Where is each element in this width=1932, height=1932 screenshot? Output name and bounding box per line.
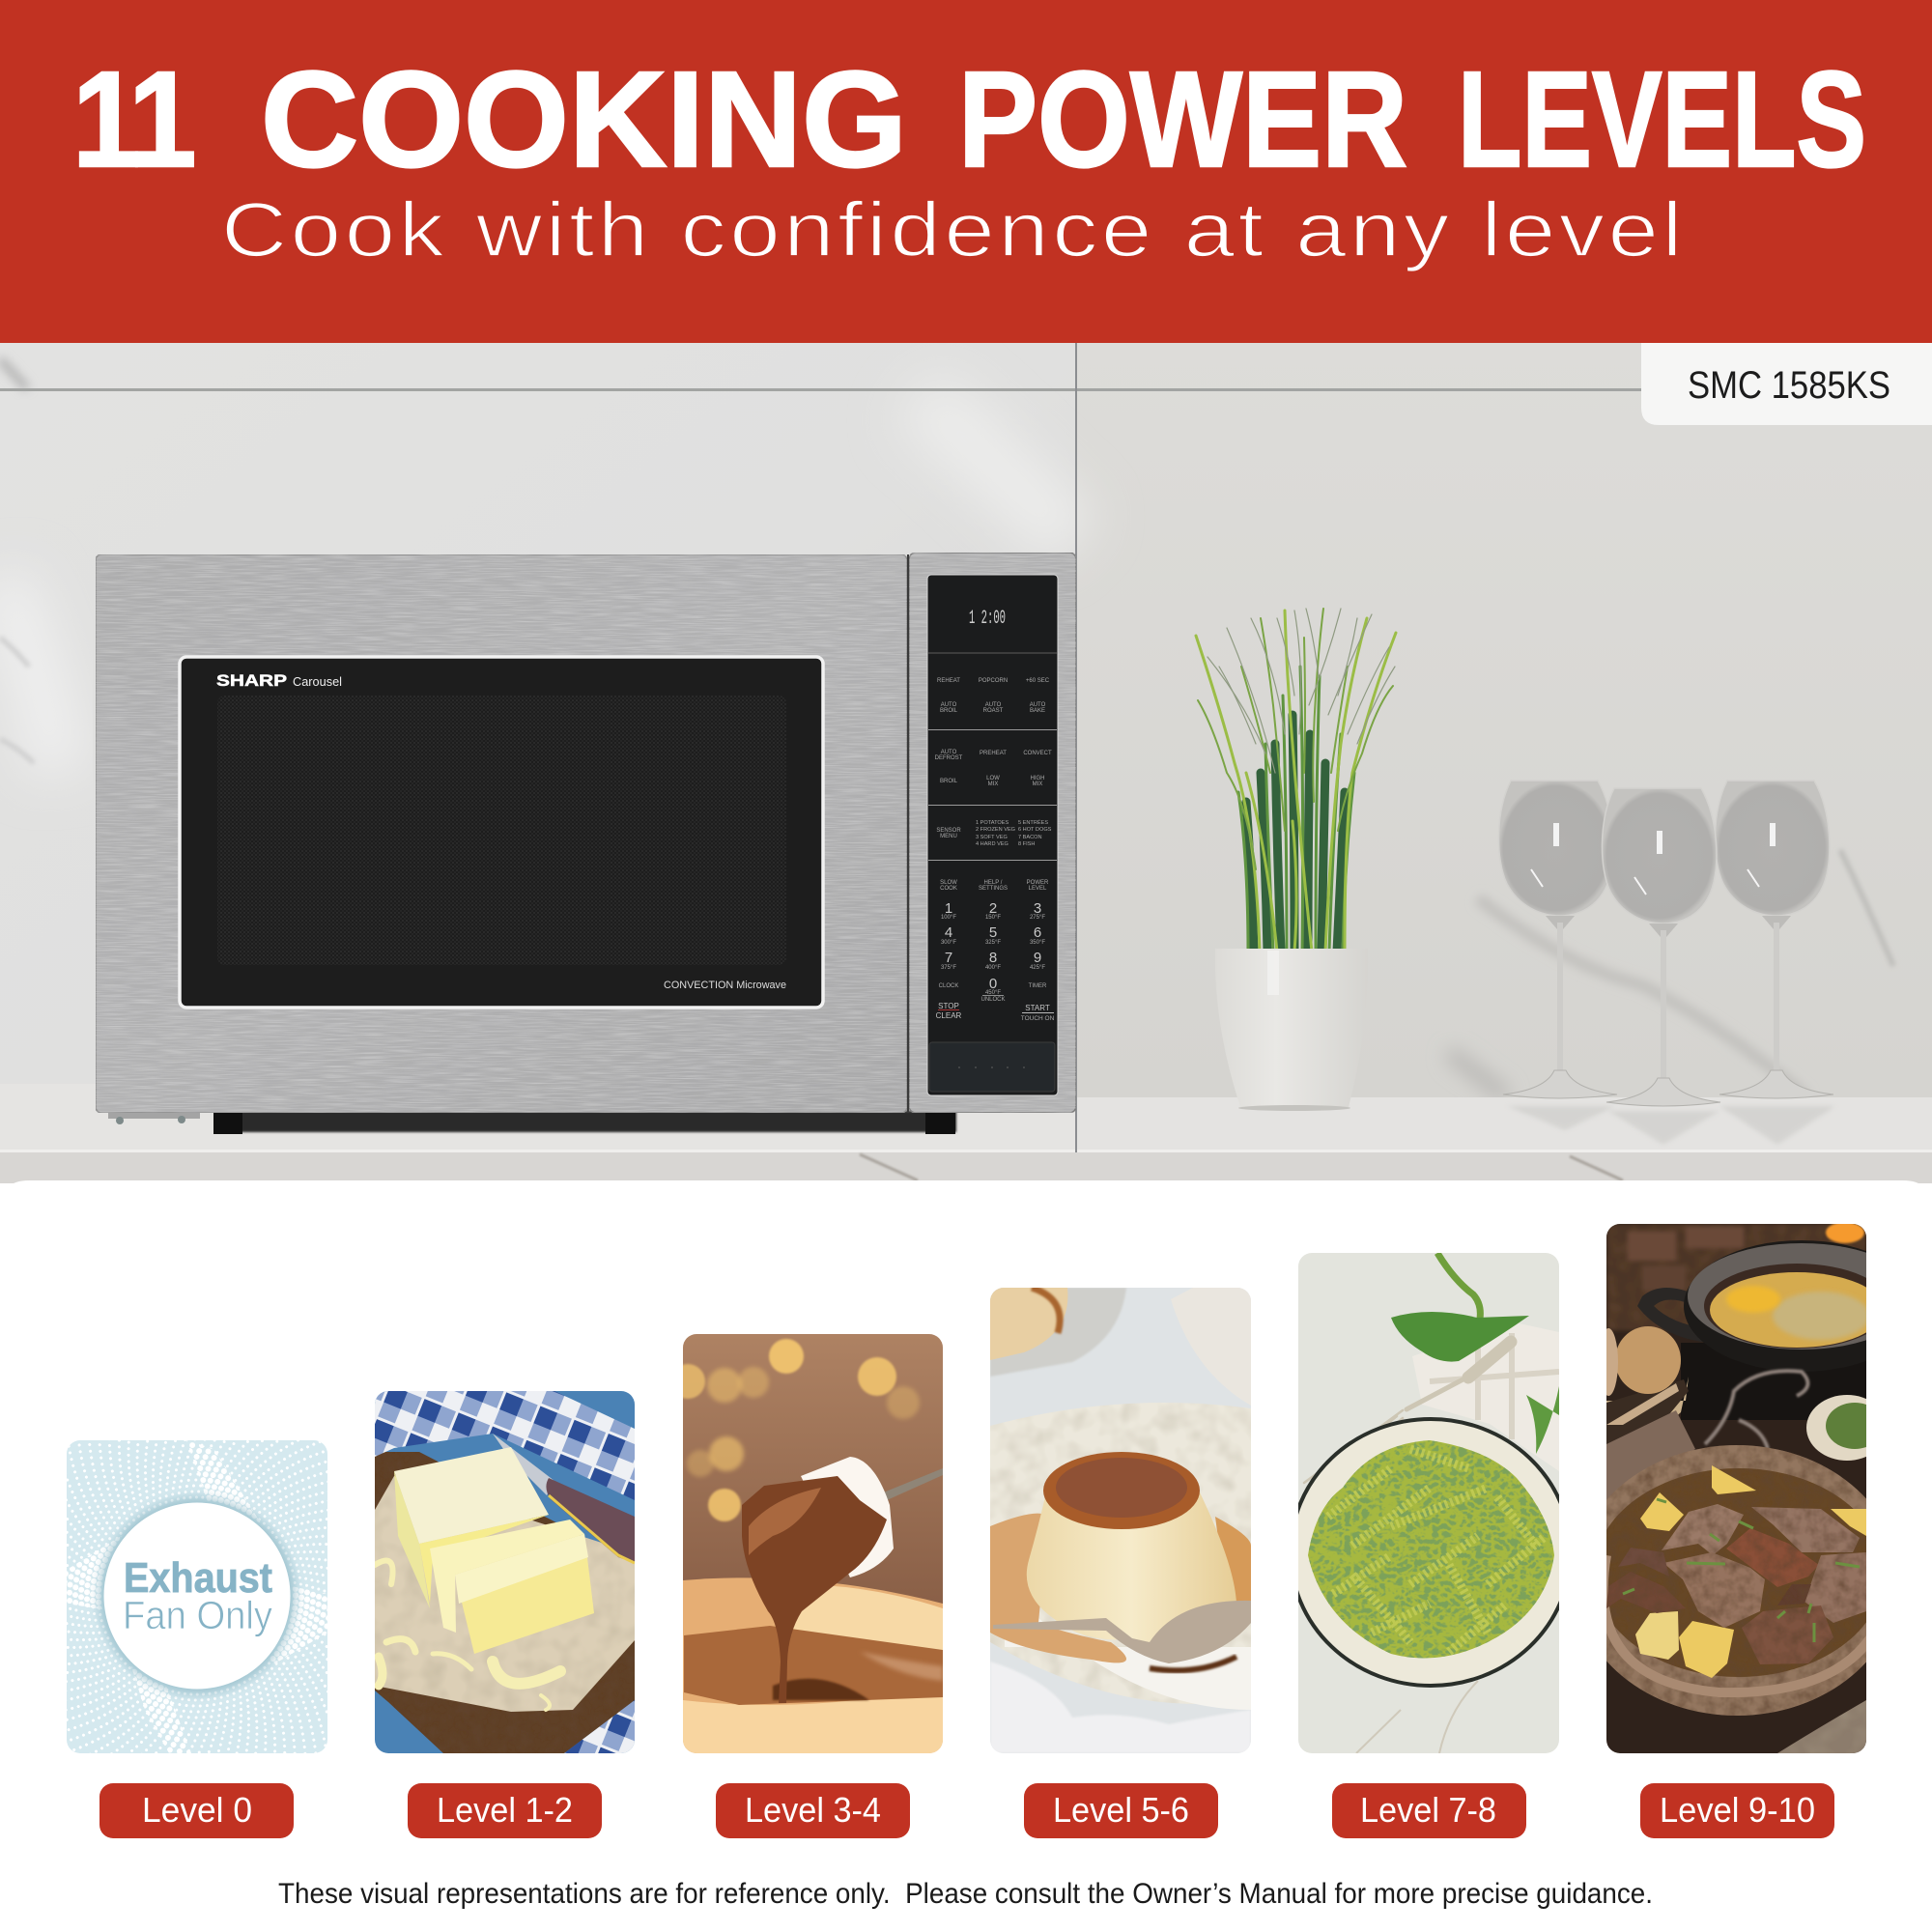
marshmallow (801, 1457, 894, 1577)
sensor menu list (976, 819, 1052, 847)
sensor menu list: 8 FISH (1018, 841, 1035, 847)
card: level 0 exhaust fan (67, 1440, 327, 1753)
number keypad: 4 (945, 924, 952, 941)
function buttons (935, 678, 1052, 839)
clock display: 1 2:00 (969, 608, 1006, 630)
sensor menu list: 3 SOFT VEG (976, 835, 1008, 840)
bowl (683, 1577, 943, 1753)
function buttons: MENU (940, 834, 957, 839)
steam (1705, 1371, 1807, 1449)
number keypad: 7 (945, 950, 952, 966)
function buttons: MIX (1033, 781, 1042, 787)
number keypad: 450°F (985, 990, 1001, 996)
number keypad: 1 (945, 900, 952, 917)
microwave shadow and feet (108, 1111, 956, 1134)
bokeh lights (670, 1339, 920, 1521)
function buttons: AUTO (985, 702, 1002, 708)
potatoes (1635, 1465, 1866, 1678)
number keypad: 100°F (941, 915, 956, 921)
plant pot (1215, 949, 1368, 1107)
flame (1826, 1222, 1864, 1243)
number keypad: 3 (1034, 900, 1041, 917)
white hub circle (104, 1503, 290, 1689)
potted plant (1196, 609, 1396, 1111)
title: 11 (72, 43, 193, 195)
level label: level 0 (99, 1783, 294, 1838)
sensor menu list: 7 BACON (1018, 835, 1042, 840)
number keypad: UNLOCK (980, 997, 1006, 1003)
fan only label: Fan Only (123, 1593, 272, 1637)
number keypad: 375°F (941, 965, 956, 971)
number keypad: LEVEL (1029, 886, 1047, 892)
card: level 3-4 chocolate (670, 1334, 943, 1753)
level label: level 9-10 (1640, 1783, 1834, 1838)
control panel (907, 553, 1076, 1113)
small side bowl (1806, 1395, 1888, 1461)
card: level 9-10 beef stew (1575, 1222, 1919, 1753)
number keypad: SETTINGS (979, 886, 1008, 892)
number keypad: 150°F (985, 915, 1001, 921)
white cloth (990, 1662, 1251, 1753)
number keypad: SLOW (940, 880, 957, 886)
function buttons: PREHEAT (980, 751, 1007, 756)
sensor menu list: 2 FROZEN VEG (976, 827, 1015, 833)
sensor menu list: 5 ENTRÉES (1018, 819, 1048, 826)
level label: level 3-4: Level 3-4 (745, 1790, 881, 1830)
model number tag: SMC 1585KS (1688, 364, 1890, 407)
level label: level 5-6 (1024, 1783, 1218, 1838)
fork (1304, 1342, 1511, 1493)
level label: level 7-8: Level 7-8 (1360, 1790, 1496, 1830)
soup (1710, 1272, 1884, 1348)
sensor menu list: 6 HOT DOGS (1018, 827, 1052, 833)
number keypad: 9 (1034, 950, 1041, 966)
card: level 5-6 flan (990, 1288, 1251, 1753)
bottom white panel (0, 1180, 1932, 1932)
bread rolls (1599, 1326, 1689, 1449)
model descriptor: CONVECTION Microwave (664, 980, 786, 991)
basil leaves (1391, 1253, 1559, 1454)
number keypad: CLOCK (939, 983, 958, 989)
function buttons: AUTO (941, 750, 957, 755)
sensor menu list: 1 POTATOES (976, 820, 1009, 826)
function buttons: CONVECT (1023, 751, 1052, 756)
parchment paper (375, 1476, 635, 1712)
butter block (394, 1447, 594, 1654)
carousel mark: Carousel (293, 674, 342, 689)
sensor menu list: 4 HARD VEG (976, 841, 1009, 847)
number keypad: HELP / (984, 880, 1003, 886)
white scalloped plate (990, 1403, 1251, 1704)
number keypad (936, 880, 1055, 1022)
function buttons: REHEAT (937, 678, 960, 684)
number keypad: 6 (1034, 924, 1041, 941)
number keypad: START (1025, 1004, 1050, 1012)
function buttons: HIGH (1030, 776, 1045, 781)
level label: level 3-4 (716, 1783, 910, 1838)
table surface (1606, 1410, 1695, 1507)
table lower (1777, 1700, 1866, 1753)
function buttons: LOW (986, 776, 1000, 781)
herb flecks (1623, 1499, 1860, 1642)
caramel sauce (990, 1514, 1126, 1662)
microwave door window (180, 657, 823, 1008)
function buttons: AUTO (941, 702, 957, 708)
napkin (1412, 1322, 1559, 1471)
function buttons: DEFROST (935, 755, 963, 761)
function buttons: BROIL (940, 708, 958, 714)
model number tag (1641, 343, 1932, 425)
card: level 1-2 butter (375, 1391, 635, 1753)
exhaust label: Exhaust (124, 1554, 272, 1602)
card: level 7-8 pasta (1291, 1253, 1571, 1753)
glass two (1602, 788, 1720, 1106)
level label: level 0: Level 0 (142, 1790, 252, 1830)
caramel top (1043, 1452, 1200, 1529)
lace plate (1171, 1288, 1251, 1406)
header banner (0, 0, 1932, 343)
butter curls (375, 1561, 560, 1710)
green fusilli pasta (1308, 1440, 1554, 1658)
reflections on counter (1507, 1106, 1835, 1145)
number keypad: 425°F (1030, 965, 1045, 971)
wine glasses (1498, 781, 1835, 1145)
background ramekin (990, 1288, 1126, 1377)
number keypad: POWER (1027, 880, 1049, 886)
fan dot pattern (67, 1440, 327, 1753)
level label: level 5-6: Level 5-6 (1053, 1790, 1189, 1830)
fan blades (67, 1440, 327, 1753)
subtitle: Cook with confidence at any level (221, 186, 1686, 272)
brick background (1606, 1224, 1866, 1330)
number keypad: STOP (938, 1002, 959, 1010)
function buttons: BROIL (940, 779, 958, 784)
spoon (993, 1601, 1251, 1663)
level label: level 1-2: Level 1-2 (437, 1790, 573, 1830)
glass three (1715, 781, 1833, 1098)
number keypad: 275°F (1030, 915, 1045, 921)
function buttons: POPCORN (979, 678, 1008, 684)
function buttons: MIX (988, 781, 998, 787)
chocolate dip (742, 1476, 887, 1703)
pot (1637, 1240, 1919, 1420)
number keypad: 325°F (985, 940, 1001, 946)
number keypad: 2 (989, 900, 997, 917)
title (72, 43, 1866, 195)
number keypad: 5 (989, 924, 997, 941)
title: COOKING (261, 43, 907, 195)
glass one (1498, 781, 1617, 1098)
function buttons: BAKE (1030, 708, 1045, 714)
footnote: These visual representations are for reference only. Please consult the Owner’s Manual for more precise guidance. (278, 1878, 1653, 1910)
number keypad: 8 (989, 950, 997, 966)
number keypad: 350°F (1030, 940, 1045, 946)
level label: level 9-10: Level 9-10 (1660, 1790, 1815, 1830)
number keypad: 400°F (985, 965, 1001, 971)
grass blades (1196, 609, 1396, 952)
number keypad: CLEAR (936, 1011, 962, 1020)
beef chunks (1606, 1504, 1866, 1664)
function buttons: +60 SEC (1026, 678, 1050, 684)
scene: kitchen wall and counter background (0, 343, 1932, 1183)
number keypad: COOK (940, 886, 957, 892)
wooden board (375, 1452, 635, 1753)
level label: level 1-2 (408, 1783, 602, 1838)
number keypad: 0 (989, 976, 997, 992)
flan body (1027, 1492, 1236, 1651)
lower vent window (929, 1042, 1055, 1092)
level label: level 7-8 (1332, 1783, 1526, 1838)
number keypad: TIMER (1029, 983, 1047, 989)
number keypad: TOUCH ON (1021, 1015, 1055, 1022)
number keypad: 300°F (941, 940, 956, 946)
brand logo: SHARP (216, 671, 287, 690)
pasta bowl (1291, 1419, 1571, 1686)
microwave body (96, 554, 907, 1113)
knife (493, 1434, 635, 1563)
function buttons: AUTO (1030, 702, 1046, 708)
microwave (96, 553, 1076, 1134)
checked cloth (375, 1391, 635, 1500)
window mesh (217, 696, 786, 965)
title: POWER (958, 43, 1407, 195)
function buttons: ROAST (983, 708, 1004, 714)
melted chocolate pool (684, 1626, 943, 1705)
spoon (881, 1468, 943, 1500)
stew plate (1575, 1445, 1899, 1716)
function buttons: SENSOR (936, 828, 961, 834)
